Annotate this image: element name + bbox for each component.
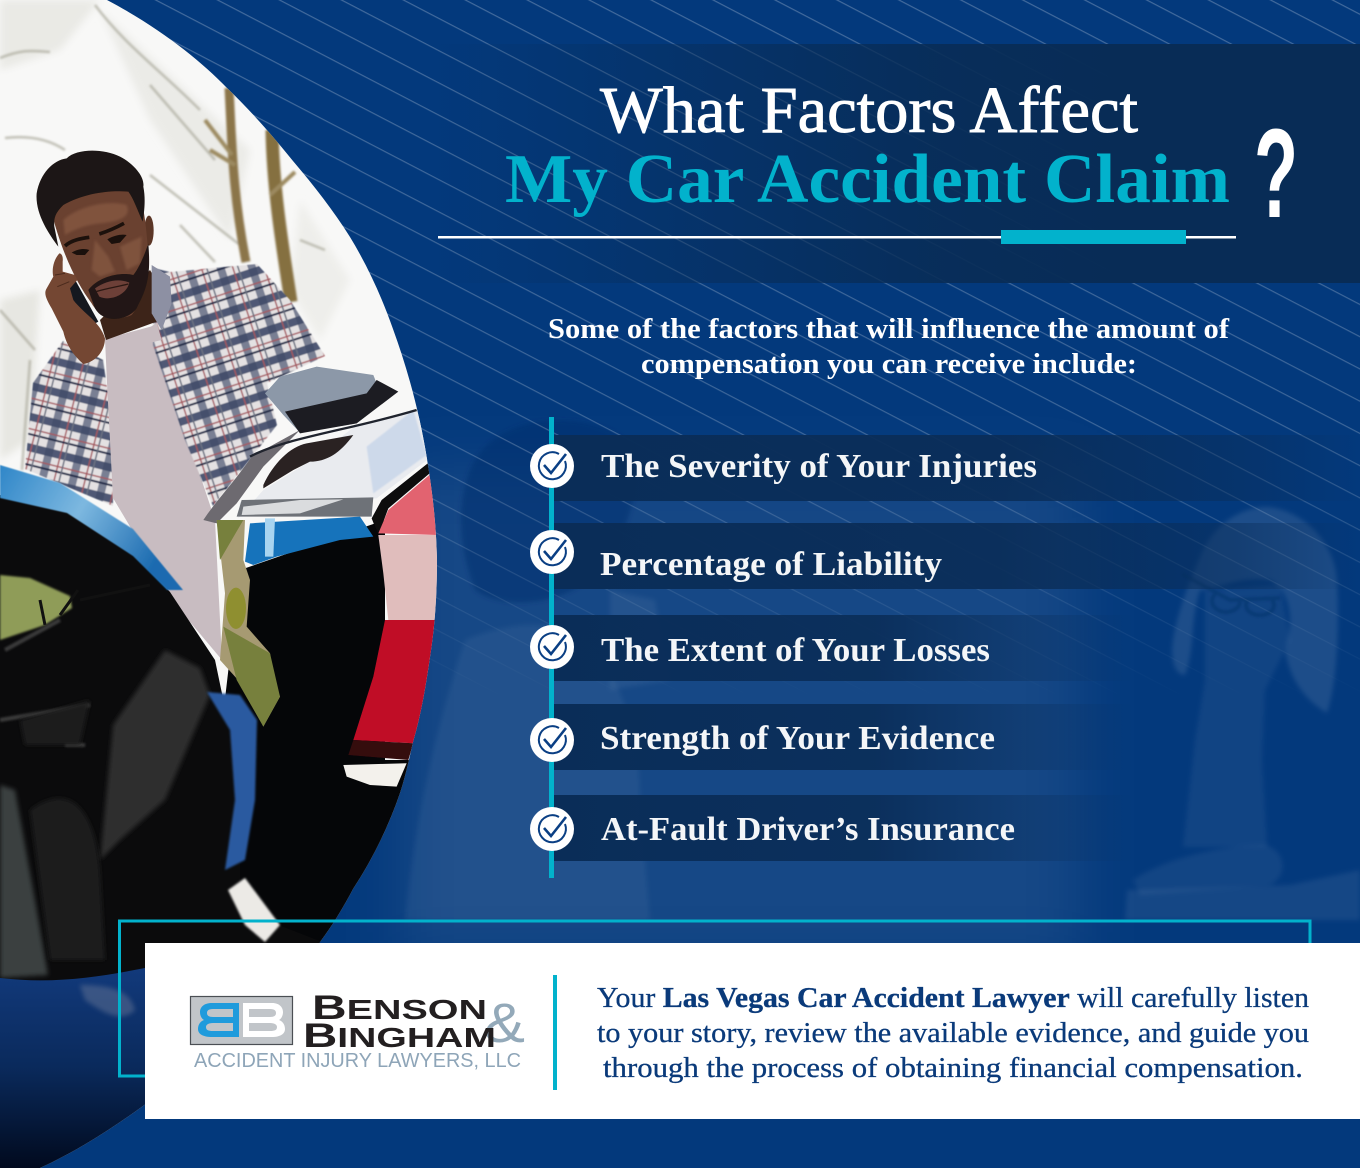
intro text [548, 314, 1230, 380]
footer divider [553, 975, 557, 1090]
brows [65, 223, 124, 246]
footer panel [145, 943, 1360, 1119]
logo tagline: ACCIDENT INJURY LAWYERS, LLC [194, 1050, 521, 1072]
tail light pale [378, 535, 437, 620]
window reflection [263, 435, 353, 488]
grass left [0, 575, 72, 640]
olive reflection [217, 520, 280, 727]
list item 1: The Severity of Your Injuries [601, 448, 1037, 485]
hair [37, 151, 145, 247]
t-shirt collar [105, 322, 162, 342]
cyan frame [120, 921, 1310, 1076]
desk [1125, 870, 1360, 920]
dark frame [372, 463, 430, 524]
icon: check circle [530, 625, 574, 669]
footer text: Your Las Vegas Car Accident Lawyer will carefully listen [597, 982, 1310, 1014]
list item 2: Percentage of Liability [600, 546, 942, 583]
icon: check circle [530, 530, 574, 574]
right car, drawn at 3x [203, 367, 437, 787]
icon: check circle [530, 807, 574, 851]
header band [430, 44, 1360, 283]
icon: check circle [530, 444, 574, 488]
list item 3: The Extent of Your Losses [601, 632, 990, 669]
list item 5: At-Fault Driver’s Insurance [601, 811, 1015, 848]
diagonal line pattern [154, 0, 1360, 658]
man: t-shirt [105, 326, 222, 660]
ear [144, 216, 154, 246]
title rule [438, 230, 1236, 244]
hand [45, 253, 105, 364]
woman face and torso [1183, 585, 1290, 847]
intro text: compensation you can receive include: [641, 349, 1137, 380]
icon: check circle [530, 718, 574, 762]
list item 2 [530, 530, 942, 583]
list row bands [553, 435, 1360, 861]
timeline vertical line [549, 417, 554, 878]
question mark: ? [1254, 103, 1298, 244]
footer text: to your story, review the available evidence, and guide you [597, 1017, 1309, 1049]
beard [88, 243, 149, 319]
title [505, 74, 1298, 244]
logo: B INGHAM [303, 1017, 496, 1055]
side mirror [265, 366, 376, 431]
man: head and hand, drawn at 3x [37, 151, 172, 364]
white debris [228, 878, 280, 942]
footer text: through the process of obtaining financial compensation. [603, 1052, 1303, 1084]
woman hair [1172, 507, 1338, 713]
car left: grey plastic panel [100, 650, 210, 860]
tail light red [353, 620, 437, 743]
mouth [95, 280, 129, 298]
woman arm [1133, 845, 1283, 895]
client hair [461, 420, 636, 602]
trim line [250, 410, 417, 457]
silver body panel [238, 410, 432, 518]
logo ampersand: & [484, 991, 525, 1054]
logo [190, 989, 525, 1072]
title line 2: My Car Accident Claim [505, 141, 1230, 218]
blue panel [245, 517, 373, 565]
car left: blue strip [207, 692, 257, 870]
man: left sleeve [25, 341, 113, 506]
faded background photo: lawyer meeting [400, 420, 1360, 960]
photo: man on phone beside crashed cars [0, 0, 440, 1168]
man: shirt front panel [153, 264, 325, 506]
eyes [72, 235, 127, 255]
car left: engine bay [0, 495, 330, 990]
dark patterned band [237, 497, 373, 517]
blurred sky tones [0, 0, 350, 460]
car left: dark blue lower bumper [0, 965, 160, 1168]
list item 4: Strength of Your Evidence [600, 720, 995, 757]
tail light pink [378, 472, 437, 535]
intro text: Some of the factors that will influence the amount of [548, 314, 1230, 345]
car left: blue hood [0, 465, 183, 590]
neck [100, 270, 157, 340]
grey door edge [203, 430, 300, 523]
shirt collar [152, 265, 172, 330]
phone [70, 282, 98, 323]
title line 1: What Factors Affect [600, 74, 1138, 147]
bare trees [0, 5, 325, 470]
cheek and nose highlight [92, 237, 142, 277]
footer text [597, 982, 1310, 1084]
car left: broken headlight [0, 785, 48, 978]
sky [0, 0, 440, 1168]
logo name: B ENSON [312, 989, 487, 1027]
logo mark [190, 996, 292, 1044]
client jacket [405, 625, 650, 920]
black mass behind right car [226, 520, 409, 943]
face [54, 191, 148, 318]
forehead highlight [63, 203, 128, 235]
list item 3 [530, 625, 990, 669]
list item 4 [530, 718, 995, 762]
